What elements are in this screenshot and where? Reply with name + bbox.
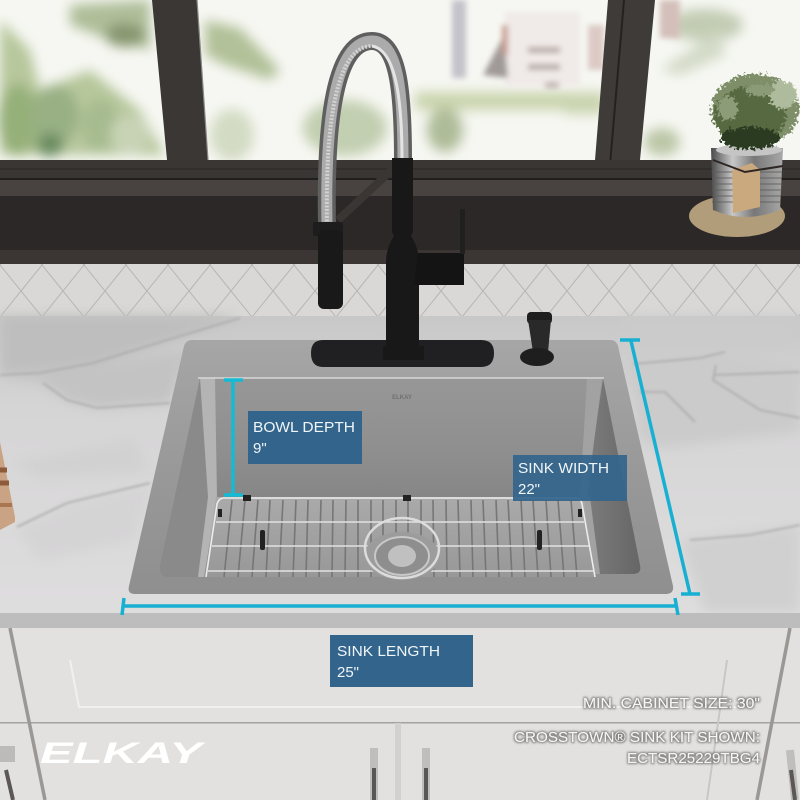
dimension: sink length arrow — [122, 598, 678, 615]
left hillside trees — [0, 20, 165, 155]
cork trivet — [689, 195, 785, 237]
minimum cabinet size note: MIN. CABINET SIZE: 30" — [583, 695, 760, 712]
bowl left wall — [160, 378, 215, 577]
bowl floor — [205, 497, 595, 577]
deck plate — [311, 340, 494, 367]
bowl back wall — [200, 378, 602, 498]
label: sink length: SINK LENGTH — [337, 643, 440, 660]
handle — [414, 253, 464, 285]
lower door panels — [395, 723, 401, 800]
right pane trees — [667, 9, 743, 41]
label: sink width — [513, 455, 627, 501]
tag — [732, 163, 760, 213]
spray arm — [338, 168, 394, 220]
cabinet handles — [374, 748, 795, 800]
label: sink width: 22" — [518, 481, 540, 498]
sink — [129, 340, 673, 594]
herringbone backsplash — [0, 264, 800, 316]
drain strainer — [364, 518, 440, 580]
dimension: bowl depth arrow — [224, 380, 243, 495]
upper drawer panel — [70, 660, 745, 707]
window sill — [0, 160, 800, 265]
sink kit shown note — [514, 729, 760, 767]
wooden board at left edge — [0, 442, 15, 530]
marble countertop — [0, 316, 800, 628]
spout arc — [327, 41, 403, 225]
elkay mini logo: ELKAY — [392, 395, 412, 401]
label: sink length: 25" — [337, 664, 359, 681]
marble veins — [0, 318, 800, 540]
faucet body — [383, 158, 424, 360]
label: sink width: SINK WIDTH — [518, 460, 609, 477]
marble grey patches — [0, 316, 800, 612]
spray head — [313, 222, 343, 236]
label: sink length — [330, 635, 473, 687]
sink kit shown note: CROSSTOWN® SINK KIT SHOWN: — [514, 729, 760, 746]
bowl right wall — [586, 378, 640, 574]
label: bowl depth: BOWL DEPTH — [253, 419, 355, 436]
second pane trees — [205, 20, 280, 80]
white cabinets — [0, 628, 800, 800]
foliage — [711, 74, 799, 149]
window frame mullions — [152, 0, 655, 180]
elkay logo: ELKAY — [40, 737, 207, 770]
counter front edge — [0, 613, 800, 628]
window view background — [0, 0, 800, 162]
potted herb plant — [689, 74, 799, 237]
label: bowl depth: 9" — [253, 440, 267, 457]
label: bowl depth — [248, 411, 362, 464]
dimension: sink width arrow — [620, 340, 700, 594]
sink kit shown note: ECTSR25229TBG4 — [627, 750, 760, 767]
sink deck — [129, 340, 673, 594]
rack feet — [260, 530, 265, 550]
soap dispenser — [520, 312, 554, 366]
wire grid — [206, 495, 595, 577]
faucet — [311, 41, 554, 367]
tin can — [711, 148, 783, 217]
